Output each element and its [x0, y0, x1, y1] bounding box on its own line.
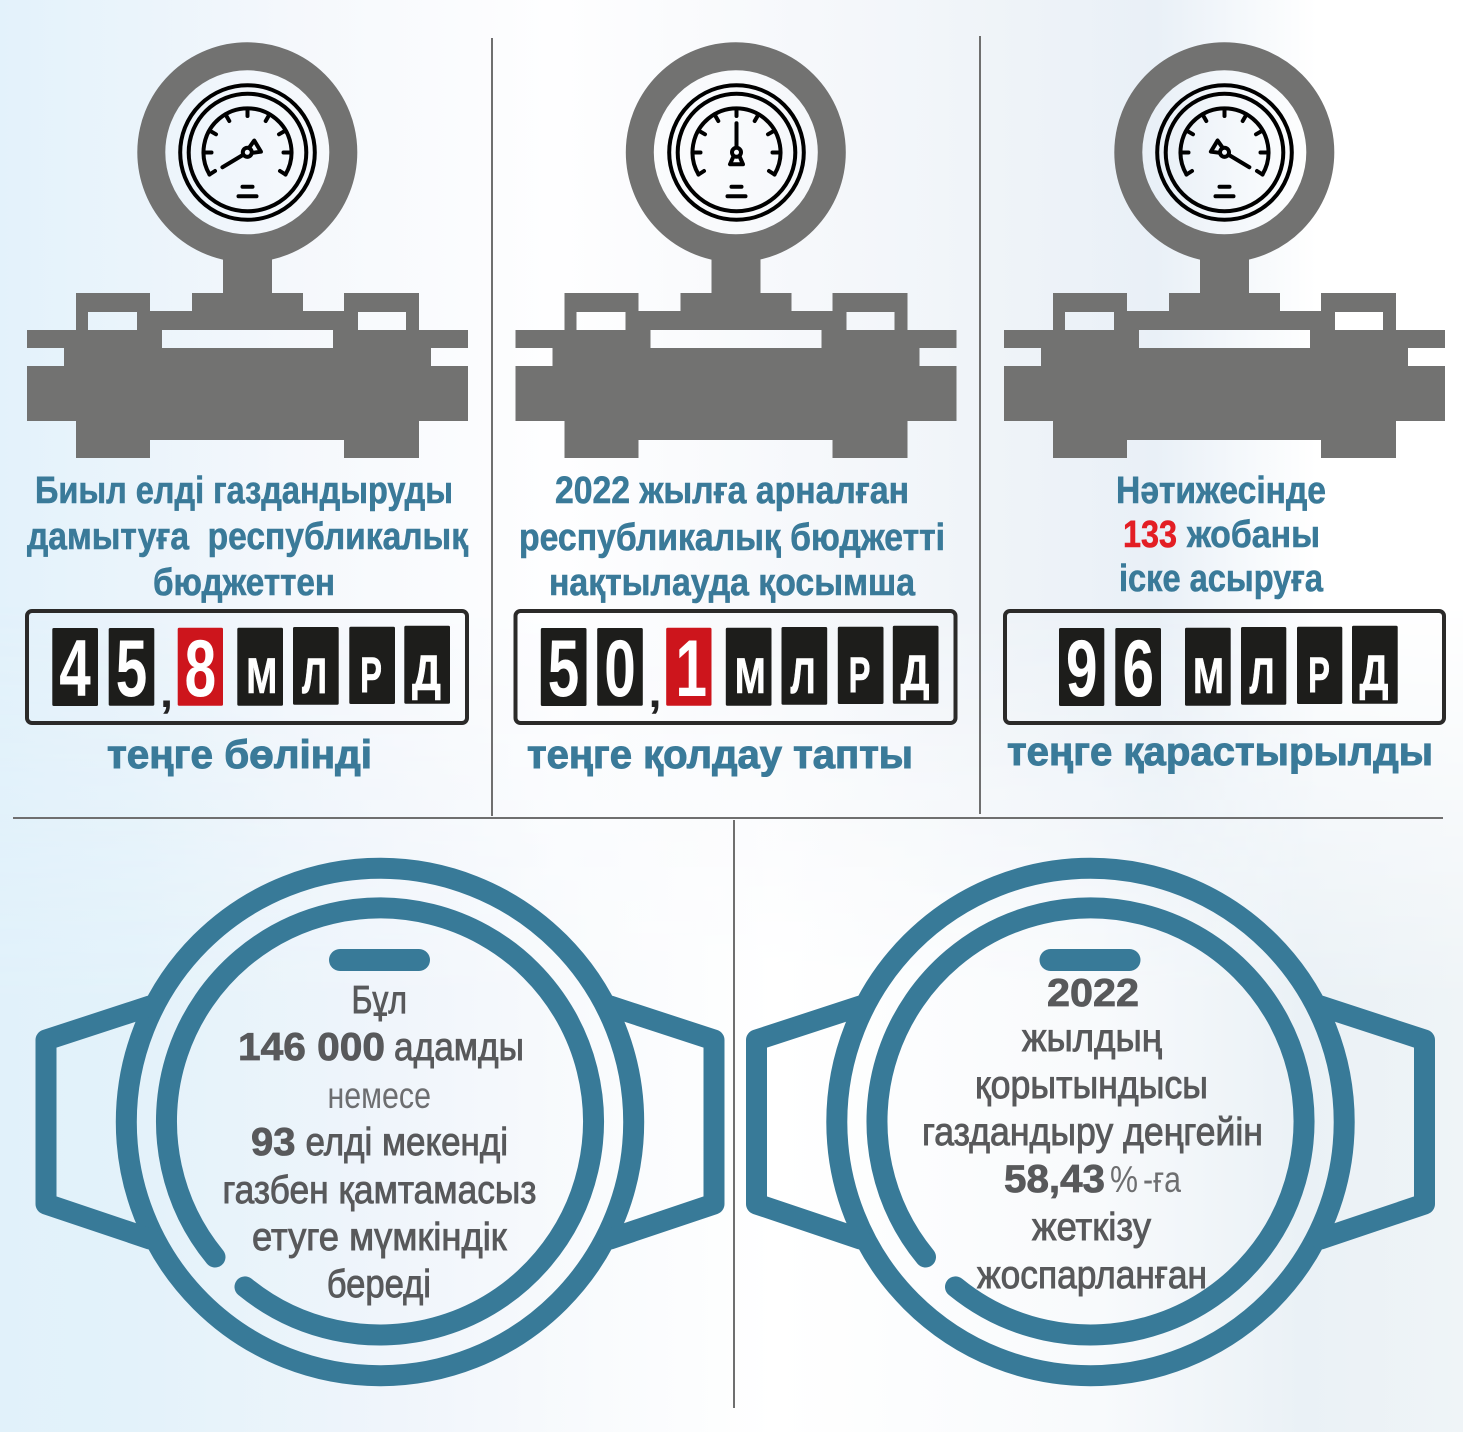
heading: budget clarification text: 2022 жылға арналған: [555, 470, 909, 512]
counter: 45,8 млрд: [27, 611, 467, 723]
icon: pressure gauge on pipe: [516, 56, 956, 458]
text: coverage statement: газбен қамтамасыз: [222, 1169, 536, 1212]
counter: 45,8 млрд: 4: [59, 624, 91, 714]
heading: projects text: іске асыруға: [1119, 558, 1324, 600]
counter: 96 млрд: 6: [1122, 624, 1154, 714]
heading: budget allocation text: [27, 470, 469, 604]
text: gasification statement: %: [1110, 1159, 1138, 1200]
icon: pressure gauge on pipe: [1004, 56, 1445, 458]
caption: теңге қарастырылды: теңге қарастырылды: [1007, 730, 1433, 774]
counter: 50,1 млрд: М: [735, 648, 766, 704]
counter: 50,1 млрд: ,: [648, 668, 662, 717]
counter: 45,8 млрд: М: [246, 648, 277, 704]
counter: 96 млрд: М: [1193, 648, 1224, 704]
heading: projects text: жобаны: [1186, 514, 1320, 556]
counter: 96 млрд: [1005, 611, 1444, 723]
heading: projects text: [1116, 470, 1326, 600]
text: gasification statement: 2022: [1047, 972, 1139, 1015]
counter: 45,8 млрд: 5: [116, 624, 147, 714]
text: gasification statement: қорытындысы: [975, 1064, 1208, 1107]
heading: budget clarification text: республикалық бюджетті: [519, 517, 945, 559]
icon: pipe ring: [46, 868, 714, 1376]
counter: 45,8 млрд: 8: [185, 624, 216, 714]
heading: budget allocation text: дамытуға республикалық: [27, 516, 469, 558]
heading: budget allocation text: бюджеттен: [153, 562, 335, 604]
counter: 96 млрд: Д: [1360, 645, 1388, 701]
text: coverage statement: елді мекенді: [306, 1121, 508, 1164]
text: gasification statement: 58,43: [1004, 1158, 1105, 1201]
text: coverage statement: 146 000: [238, 1026, 385, 1069]
counter: 50,1 млрд: Р: [848, 647, 870, 703]
heading: budget clarification text: нақтылауда қосымша: [549, 562, 916, 604]
icon: pressure gauge on pipe: [27, 56, 468, 458]
text: coverage statement: 93: [251, 1121, 296, 1164]
panel: budget allocated: [27, 56, 469, 777]
counter: 45,8 млрд: Д: [412, 645, 441, 701]
text: gasification statement: [922, 972, 1263, 1297]
text: coverage statement: немесе: [328, 1075, 431, 1116]
text: gasification statement: газдандыру деңгейін: [922, 1111, 1263, 1154]
panel: 133 projects: [1004, 56, 1445, 774]
icon: pipe ring: [756, 868, 1424, 1376]
caption: теңге қолдау тапты: теңге қолдау тапты: [527, 733, 913, 777]
counter: 45,8 млрд: Р: [360, 647, 382, 703]
text: coverage statement: береді: [327, 1263, 431, 1306]
text: coverage statement: Бұл: [352, 979, 407, 1022]
counter: 50,1 млрд: [516, 611, 956, 723]
panel: people and settlements covered: [46, 868, 714, 1376]
counter: 45,8 млрд: ,: [160, 668, 173, 717]
heading: budget allocation text: Биыл елді газдандыруды: [35, 470, 453, 512]
panel: gasification level: [756, 868, 1424, 1376]
text: gasification statement: жеткізу: [1032, 1206, 1151, 1249]
heading: budget clarification text: [519, 470, 945, 604]
text: coverage statement: [222, 979, 536, 1306]
panel: additional budget support: [516, 56, 956, 777]
counter: 50,1 млрд: Д: [900, 645, 930, 701]
text: gasification statement: жылдың: [1022, 1017, 1162, 1060]
counter: 96 млрд: Л: [1250, 648, 1274, 704]
heading: projects text: Нәтижесінде: [1116, 470, 1326, 512]
counter: 96 млрд: 9: [1066, 624, 1098, 714]
counter: 50,1 млрд: Л: [790, 648, 816, 704]
caption: теңге бөлінді: теңге бөлінді: [107, 733, 372, 777]
text: gasification statement: жоспарланған: [977, 1254, 1207, 1297]
heading: projects text: 133: [1123, 514, 1177, 556]
text: gasification statement: -ға: [1143, 1159, 1181, 1200]
counter: 96 млрд: Р: [1308, 647, 1330, 703]
counter: 45,8 млрд: Л: [302, 648, 327, 704]
text: coverage statement: етуге мүмкіндік: [252, 1216, 508, 1259]
counter: 50,1 млрд: 1: [676, 624, 707, 714]
text: coverage statement: адамды: [394, 1026, 524, 1069]
counter: 50,1 млрд: 5: [548, 624, 579, 714]
counter: 50,1 млрд: 0: [604, 624, 636, 714]
